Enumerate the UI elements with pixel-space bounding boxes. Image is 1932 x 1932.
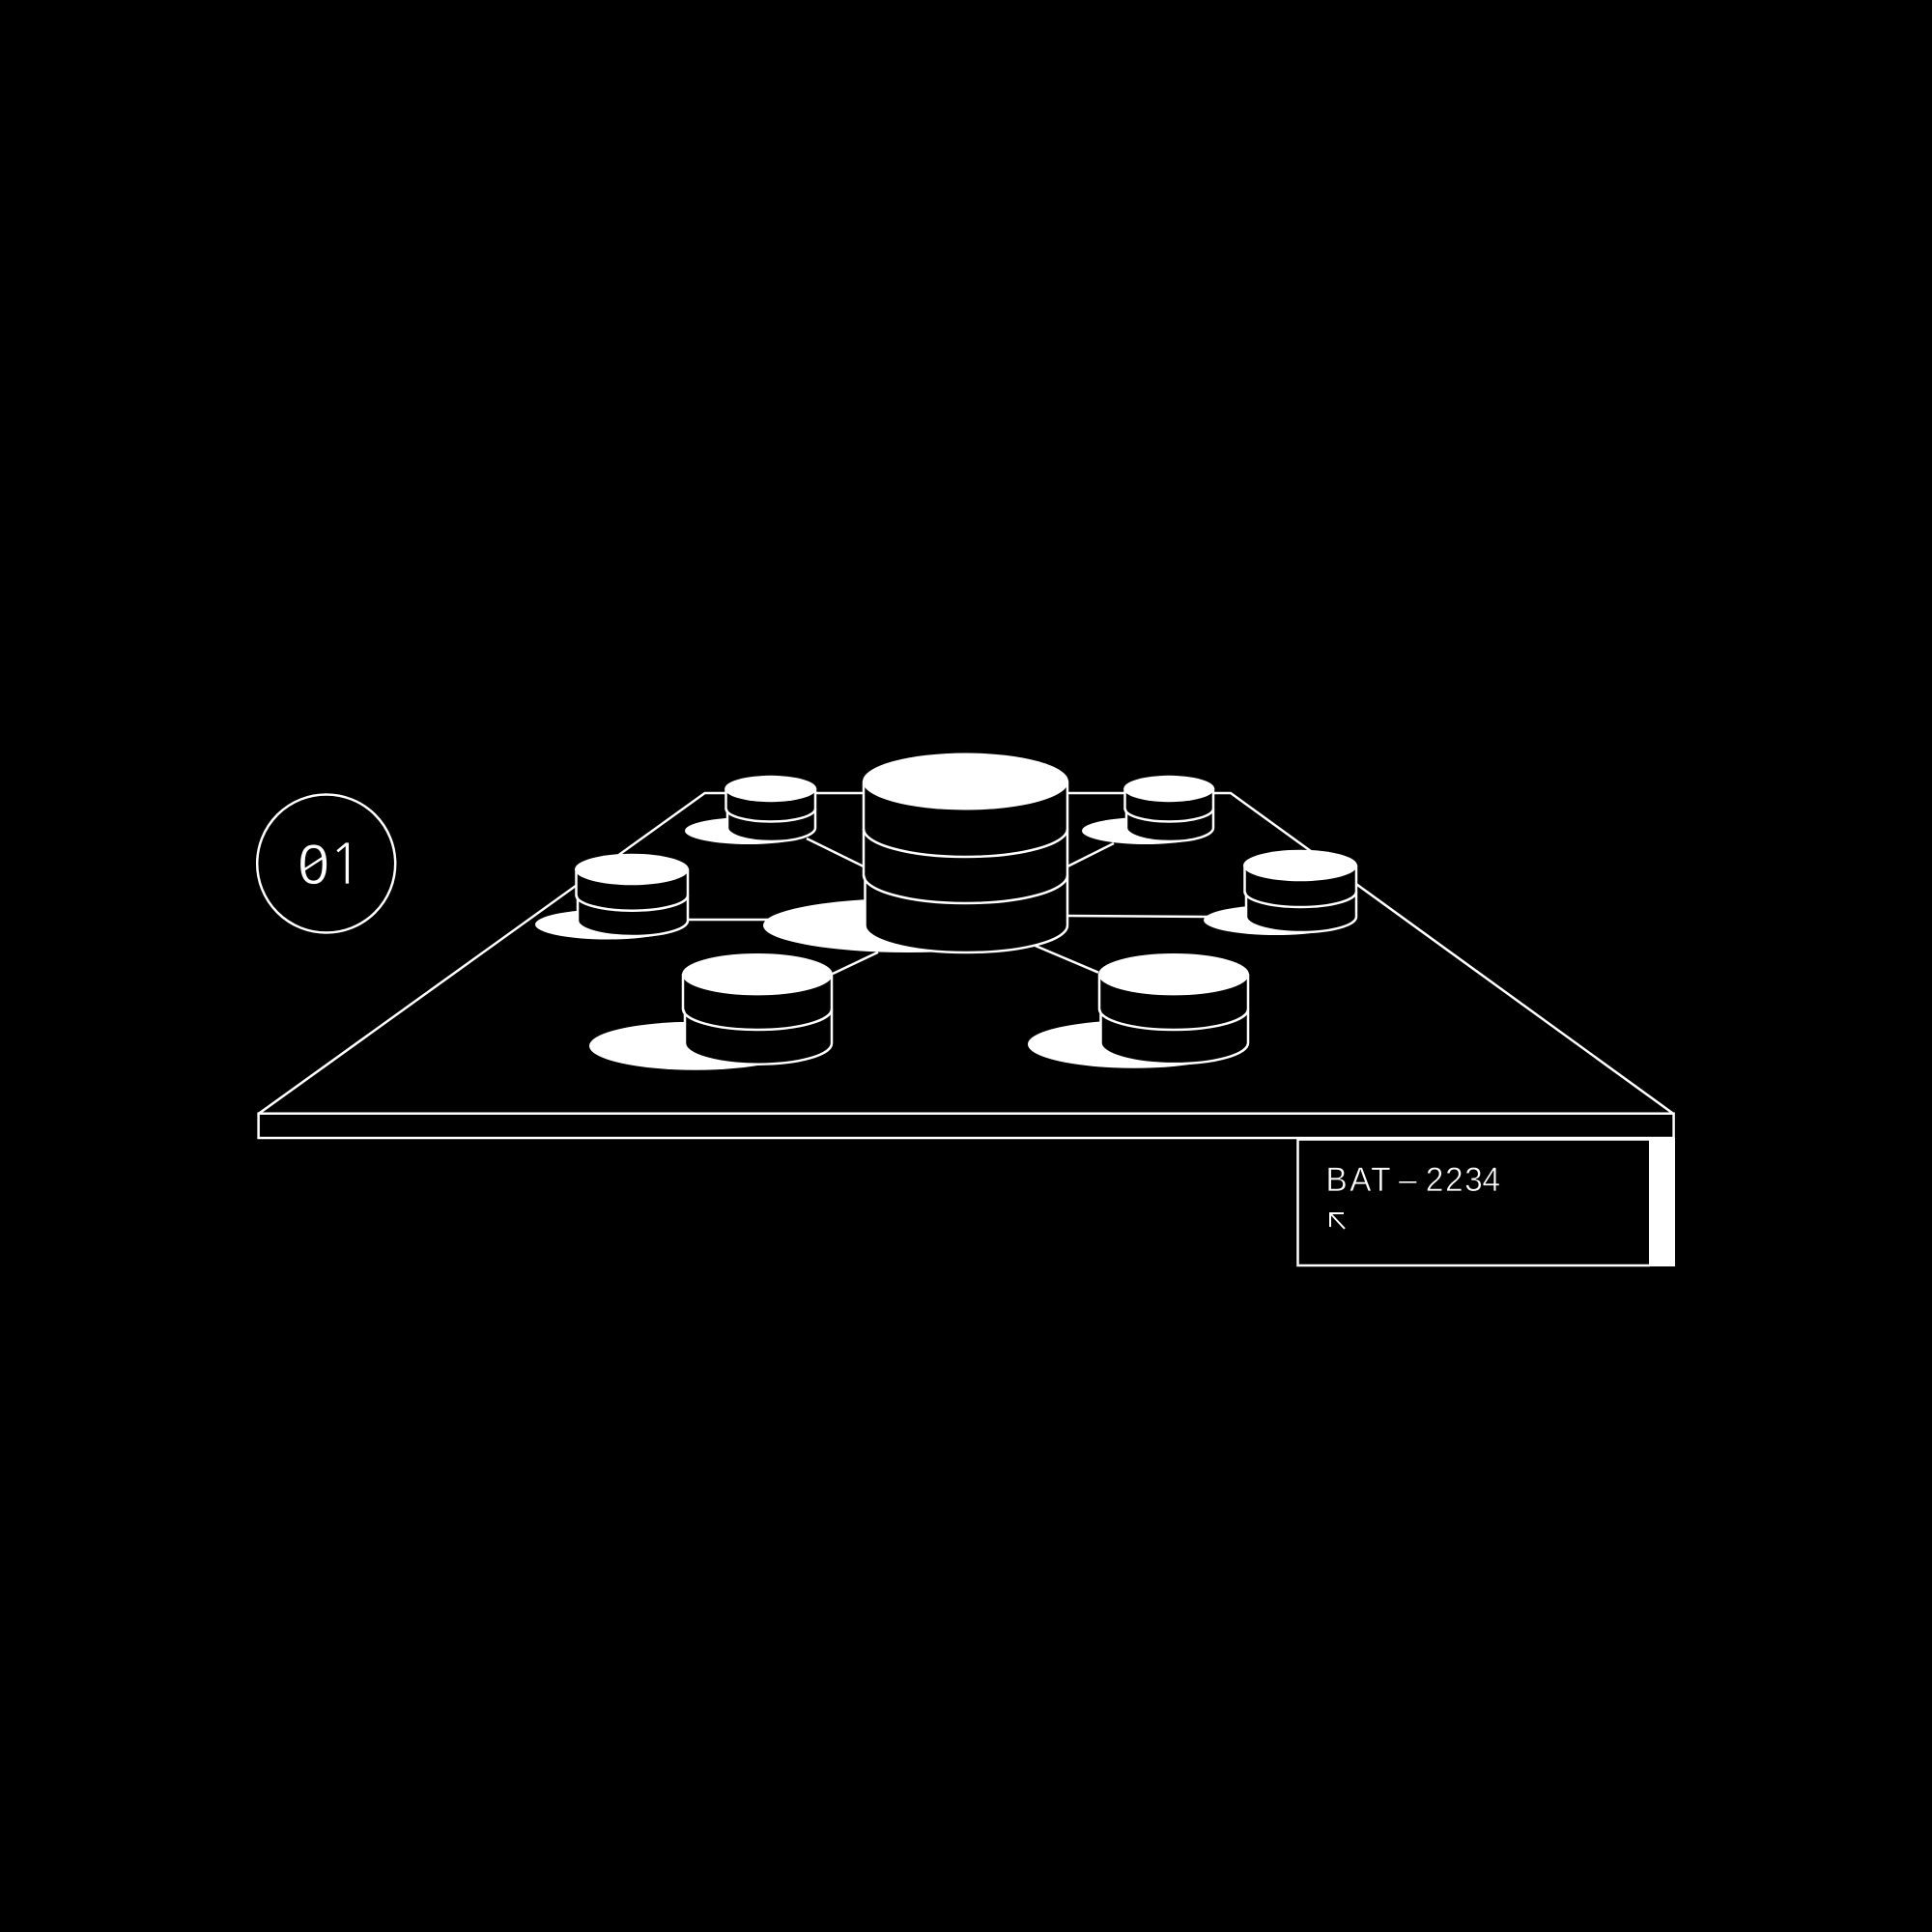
platform slab outline: [259, 793, 1674, 1138]
central large cylinder, three tiers: [863, 753, 1068, 952]
large cylinder front left: [682, 953, 833, 1065]
badge: number 01: 1: [328, 837, 362, 893]
large cylinder front right: [1098, 953, 1249, 1064]
medium cylinder mid left: [575, 854, 689, 936]
connection lines between cylinders: [689, 838, 1208, 974]
label panel: BAT – 2234: [1298, 1138, 1675, 1266]
icon: up-left arrow: [1330, 1213, 1345, 1229]
badge: number 01: 0: [298, 834, 329, 896]
label text: BAT – 2234: [1325, 1161, 1500, 1199]
small cylinder back right: [1123, 776, 1214, 841]
shadow ellipses on the platform: [535, 817, 1349, 1070]
badge: number 01: [257, 794, 395, 933]
medium cylinder mid right: [1243, 850, 1357, 932]
small cylinder back left: [724, 776, 816, 841]
